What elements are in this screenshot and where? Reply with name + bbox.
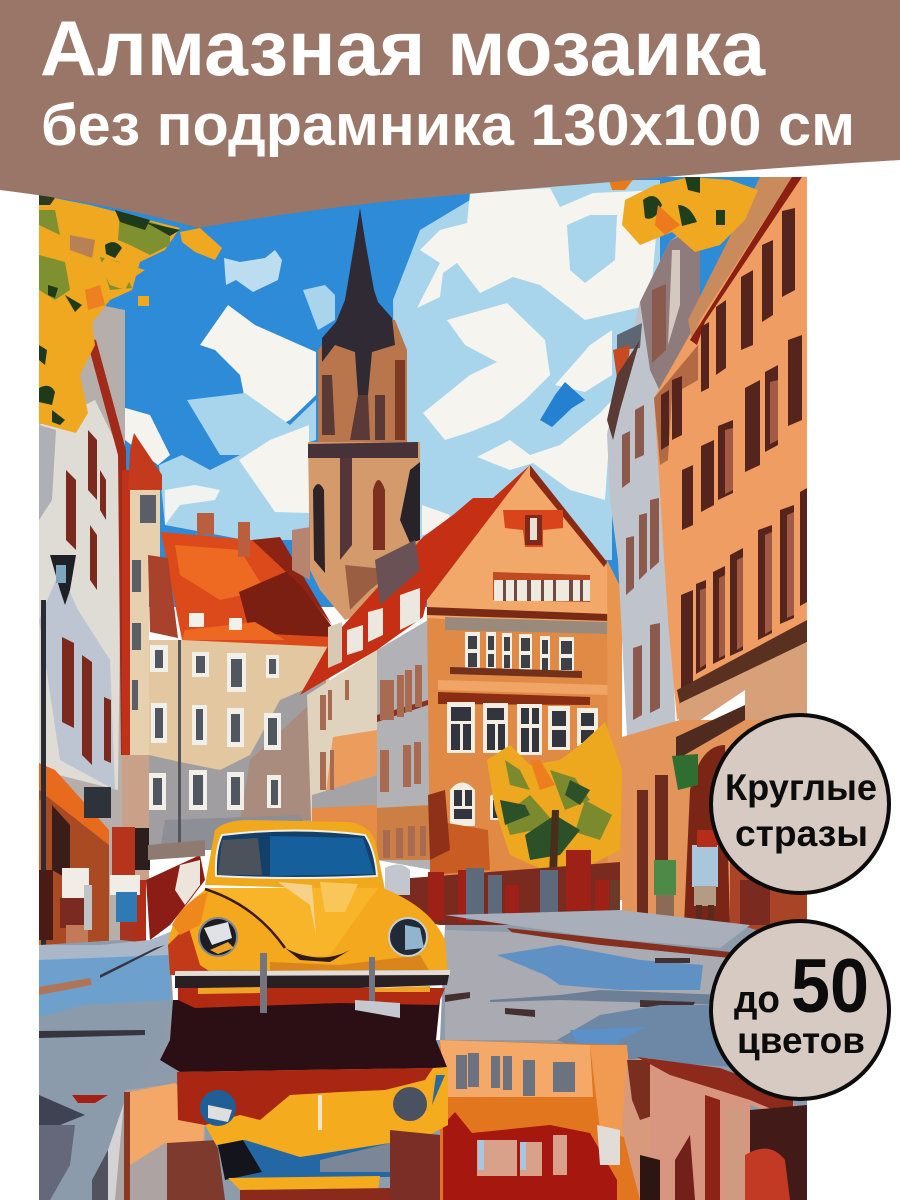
car reflection <box>177 1067 448 1200</box>
badge: round rhinestones: Круглые <box>725 767 877 808</box>
autumn tree <box>487 722 622 875</box>
car shadow <box>160 1000 447 1072</box>
badge: round rhinestones <box>711 715 889 893</box>
clouds <box>122 180 660 560</box>
right buildings <box>607 177 807 930</box>
street <box>39 910 807 1200</box>
car roof and windshield <box>205 820 385 890</box>
badge: up to 50 colours: цветов <box>737 1020 865 1061</box>
badge: round rhinestones: стразы <box>735 813 868 854</box>
white house and long roof <box>300 465 530 870</box>
badge: up to 50 colours: до <box>734 979 780 1021</box>
header banner <box>0 0 900 228</box>
title: Алмазная мозаика <box>40 4 766 92</box>
painting: city street with yellow car <box>39 177 807 1200</box>
sky <box>39 177 807 607</box>
car body <box>168 885 448 975</box>
subtitle: без подрамника 130х100 см <box>41 93 855 158</box>
building with red roof <box>148 513 332 850</box>
bumper <box>175 970 450 990</box>
crowd of people <box>39 830 770 955</box>
orange gabled building <box>427 465 622 900</box>
yellow car <box>168 820 450 1018</box>
puddle reflection of buildings <box>115 1040 807 1200</box>
headlights <box>199 918 427 956</box>
tower <box>308 208 420 620</box>
badge: up to 50 colours: 50 <box>791 944 869 1029</box>
autumn leaves top right <box>608 177 758 252</box>
autumn leaves top left <box>39 193 222 433</box>
badge: up to 50 colours <box>711 921 889 1099</box>
left buildings <box>39 305 162 950</box>
